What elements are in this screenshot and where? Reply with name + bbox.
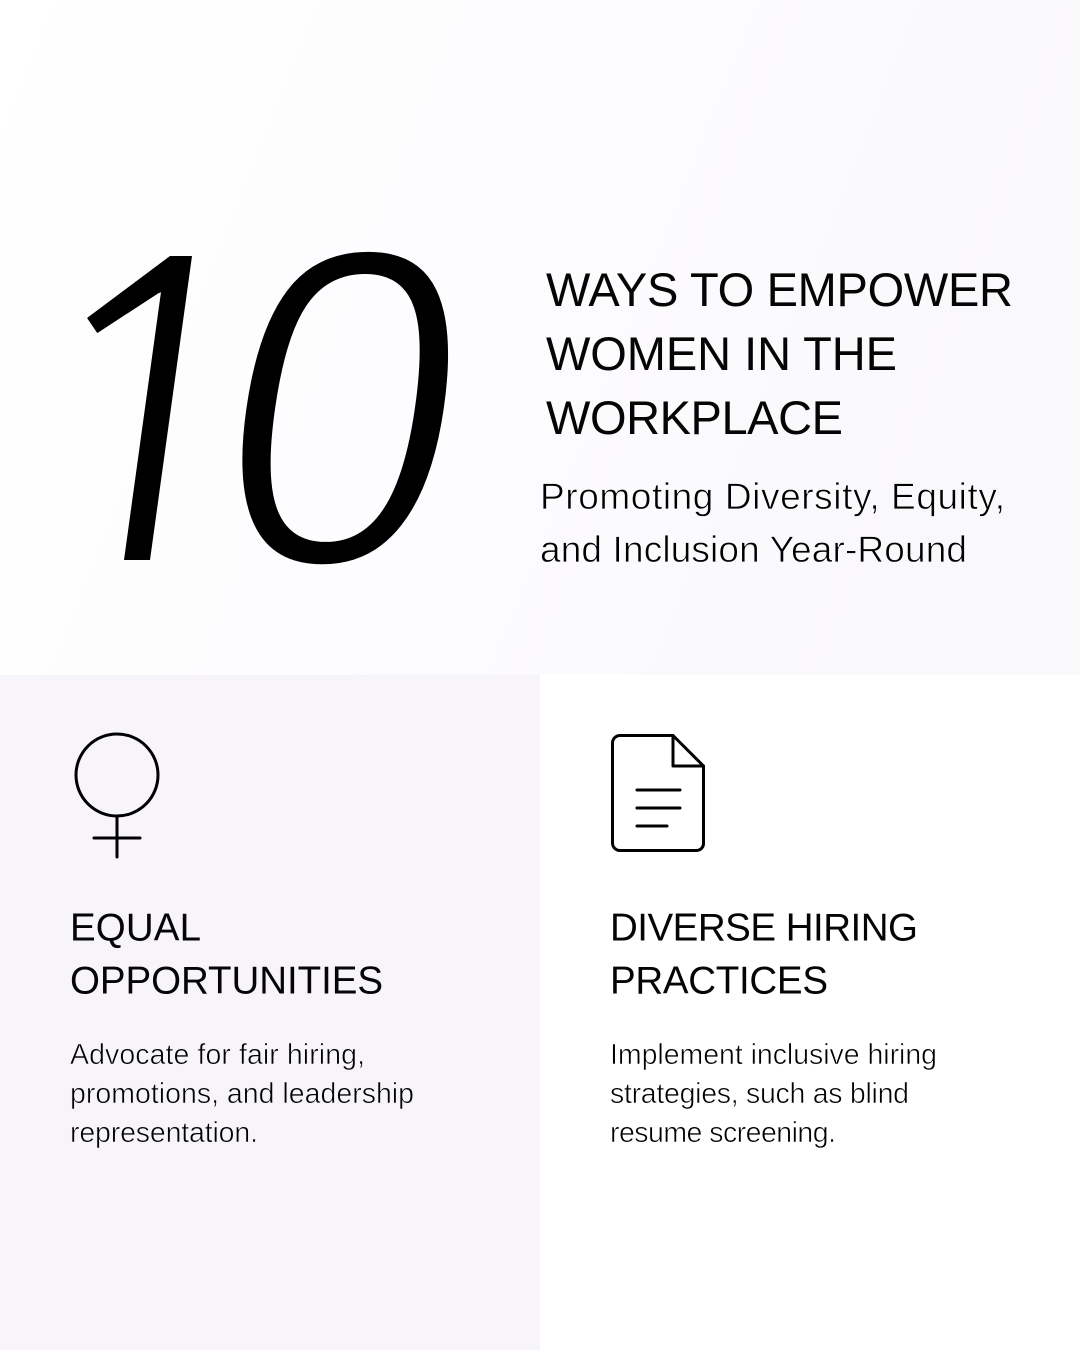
big number 10	[87, 252, 448, 564]
title: WAYS TO EMPOWER	[546, 263, 1013, 316]
text: diverse hiring body	[610, 1039, 937, 1149]
panel: diverse hiring practices	[540, 675, 1080, 1350]
text: equal opportunities body: representation.	[70, 1117, 258, 1149]
heading: diverse hiring practices	[610, 906, 918, 1002]
title	[546, 263, 1013, 444]
text: equal opportunities body: Advocate for fair hiring,	[70, 1039, 365, 1071]
panel: top header	[0, 0, 1080, 675]
text: diverse hiring body: resume screening.	[610, 1117, 836, 1149]
heading: diverse hiring practices: DIVERSE HIRING	[610, 906, 918, 950]
text: diverse hiring body: strategies, such as blind	[610, 1078, 909, 1110]
heading: equal opportunities: OPPORTUNITIES	[70, 960, 383, 1002]
title: WORKPLACE	[546, 391, 843, 444]
big number 10: 0	[188, 152, 503, 662]
text: equal opportunities body	[70, 1039, 414, 1149]
icon: document	[612, 736, 704, 850]
text: equal opportunities body: promotions, and leadership	[70, 1078, 414, 1110]
panel: equal opportunities	[0, 675, 540, 1350]
subtitle: and Inclusion Year-Round	[540, 529, 967, 570]
heading: equal opportunities	[70, 906, 383, 1002]
icon: female symbol	[76, 734, 158, 857]
text: diverse hiring body: Implement inclusive hiring	[610, 1039, 937, 1071]
title: WOMEN IN THE	[546, 327, 897, 380]
big number 10: 1	[0, 160, 312, 656]
subtitle	[540, 476, 1005, 570]
heading: diverse hiring practices: PRACTICES	[610, 960, 828, 1002]
heading: equal opportunities: EQUAL	[70, 906, 201, 950]
subtitle: Promoting Diversity, Equity,	[540, 476, 1005, 517]
